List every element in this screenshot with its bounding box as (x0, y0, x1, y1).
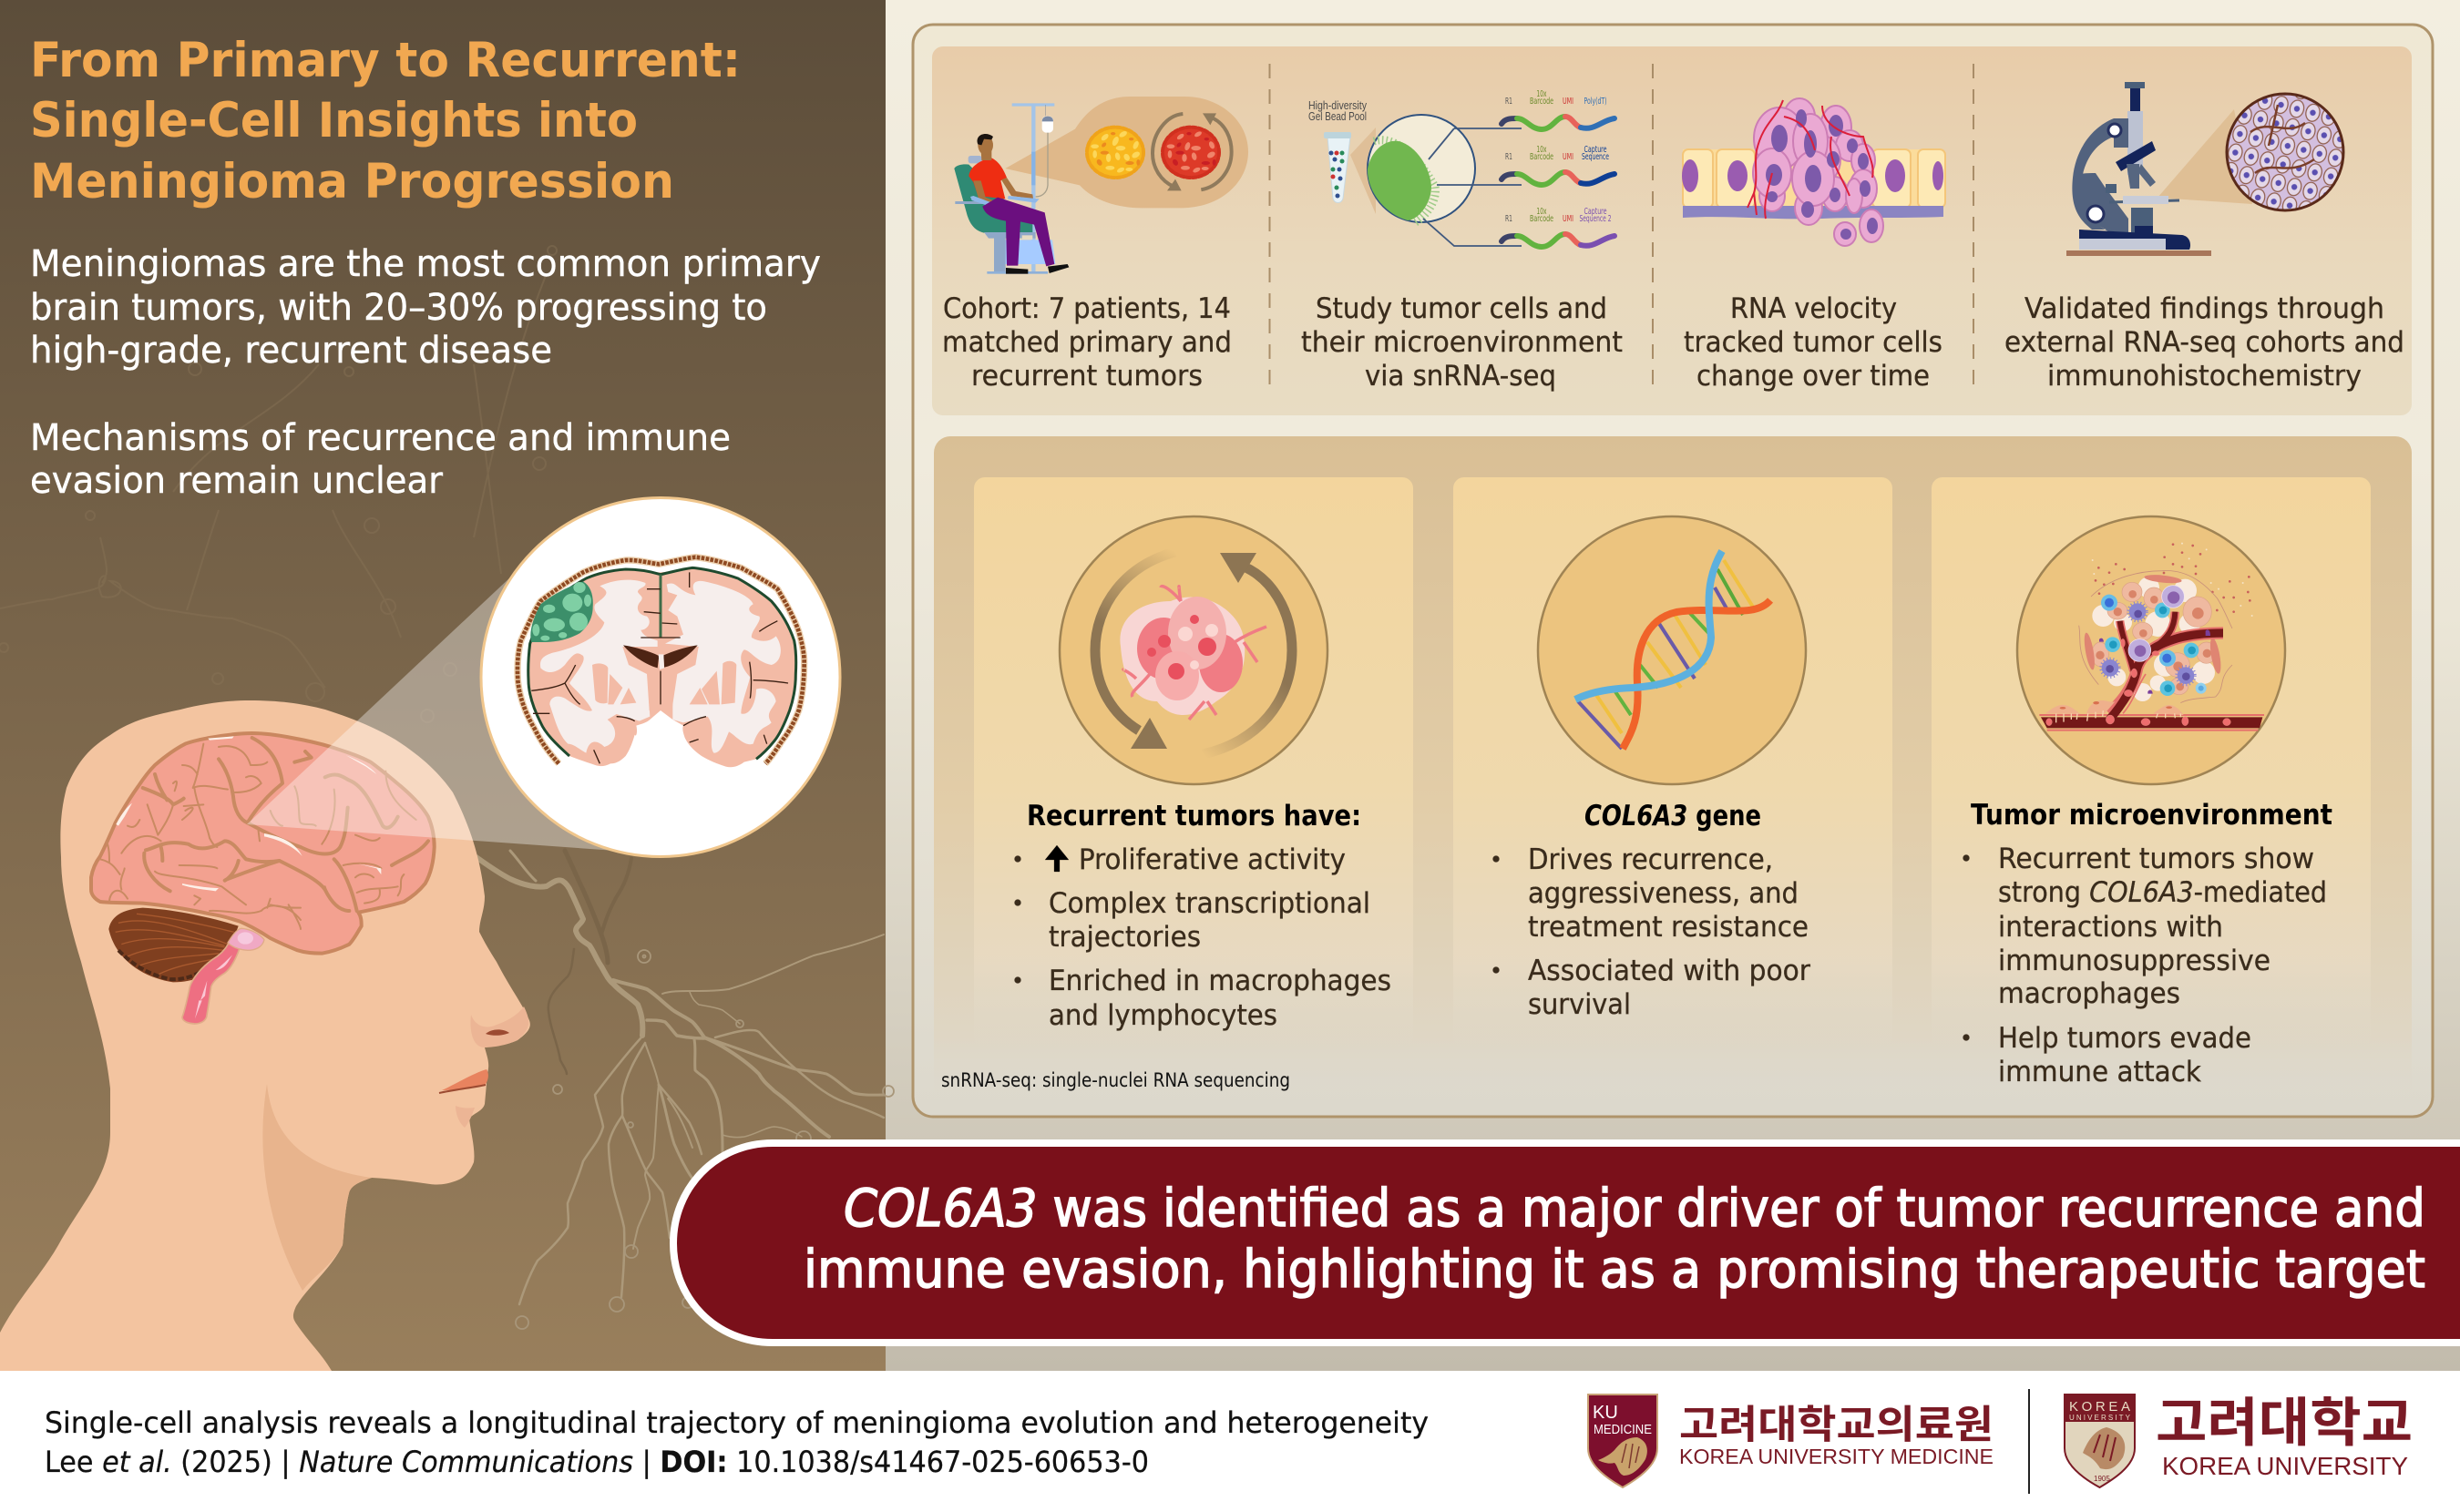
text block: cohort: recurrent tumors (971, 360, 1203, 393)
icon: gel bead and barcode sequences: Capture (1584, 207, 1607, 217)
IV pole (1012, 100, 1054, 109)
vessels (2039, 612, 2264, 730)
bullet list: aggressiveness, and (1528, 877, 1799, 910)
illustration: vein tree (471, 851, 894, 1329)
title (30, 33, 741, 209)
heading: Tumor microenvironment (1971, 799, 2332, 832)
icon: gel bead and barcode sequences: Sequence (1582, 152, 1609, 162)
panel: tumor microenvironment card (1932, 477, 2371, 1088)
text block: cohort: matched primary and (942, 326, 1232, 359)
macrophages (2102, 603, 2194, 684)
shield: UNIVERSITY (2069, 1414, 2131, 1422)
person (969, 158, 1007, 199)
red tumor (1163, 128, 1219, 178)
text block: validation: immunohistochemistry (2047, 360, 2362, 393)
bullet list: macrophages (1998, 977, 2180, 1010)
bullet list: and lymphocytes (1049, 999, 1277, 1032)
logo: Korea University Medicine: 고려대학교의료원 (1679, 1394, 1994, 1450)
text block: background statement: Meningiomas are the most common primary (30, 243, 821, 285)
text block: RNA velocity: RNA velocity (1730, 292, 1897, 325)
text block: validation: external RNA-seq cohorts and (2004, 326, 2404, 359)
pericytes (2045, 700, 2184, 722)
bullet list: Enriched in macrophages (1049, 965, 1391, 997)
panel: methods strip (932, 46, 2412, 415)
bead (1368, 115, 1475, 222)
brain slice (518, 557, 805, 767)
ventricle (623, 645, 698, 668)
divider (2028, 1389, 2030, 1494)
icon: tumor microenvironment (2039, 543, 2264, 730)
logo: Korea University (2065, 1380, 2413, 1487)
panel: COL6A3 card (1453, 477, 1892, 1047)
dura (528, 567, 796, 759)
tumor (530, 581, 593, 642)
icon: recurrence cycle with tumor (1060, 516, 1327, 784)
skull rim (518, 557, 805, 763)
cycle arrows (1153, 114, 1232, 189)
icon: tumor cells invading tissue (1682, 98, 1945, 246)
text block: background statement: brain tumors, with 20–30% progressing to (30, 287, 767, 329)
panel: findings (934, 436, 2412, 1103)
bullet list (1015, 843, 1391, 1032)
icon: DNA helix (1538, 516, 1806, 784)
icon: gel bead and barcode sequences: R1 (1505, 152, 1512, 162)
shield (2065, 1395, 2135, 1487)
icon: gel bead and barcode sequences: Sequence 2 (1580, 214, 1611, 224)
shield: KOREA (2069, 1399, 2130, 1415)
text block: background statement (30, 243, 821, 372)
decorative faint veins upper (0, 246, 557, 722)
text block: snRNA-seq: Study tumor cells and (1316, 292, 1607, 325)
text block: knowledge gap: evasion remain unclear (30, 460, 444, 502)
chair (954, 164, 1032, 233)
bullet list: Proliferative activity (1079, 843, 1346, 876)
icon: gel bead and barcode sequences: UMI (1563, 97, 1573, 107)
bullet list (1492, 843, 1810, 1021)
logo: Korea University Medicine: KOREA UNIVERSITY MEDICINE (1679, 1445, 1994, 1468)
panel: recurrent tumors card (974, 477, 1413, 1047)
panel: right background (886, 0, 2460, 1371)
shield (1588, 1395, 1657, 1487)
heading: COL6A3 gene (1584, 800, 1761, 833)
text block: validation (2004, 292, 2404, 393)
icon: gel bead and barcode sequences (1308, 89, 1614, 247)
bullet list: immune attack (1998, 1056, 2201, 1088)
callout: magnified circle with brain slice (481, 497, 840, 856)
bullet list: treatment resistance (1528, 911, 1809, 944)
plasma cells (2128, 586, 2184, 661)
panel: left background (0, 0, 886, 1371)
title: Single-Cell Insights into (30, 93, 638, 148)
bullet list: immunosuppressive (1998, 945, 2270, 977)
bullet list: survival (1528, 988, 1631, 1021)
icon: gel bead and barcode sequences: UMI (1563, 152, 1573, 162)
icon: gel bead and barcode sequences: UMI (1563, 214, 1573, 224)
icon: gel bead and barcode sequences: 10x (1536, 89, 1547, 99)
icon: gel bead and barcode sequences: 10x (1536, 145, 1547, 155)
text block: knowledge gap (30, 417, 731, 502)
illustration: brain (91, 733, 435, 1024)
bullet list: strong COL6A3-mediated (1998, 876, 2327, 909)
text block: cohort: Cohort: 7 patients, 14 (943, 292, 1231, 325)
sulci (531, 572, 788, 763)
icon: gel bead and barcode sequences: 10x (1536, 207, 1547, 217)
text block: knowledge gap: Mechanisms of recurrence and immune (30, 417, 731, 459)
highlights (116, 736, 381, 891)
bullet list: Drives recurrence, (1528, 843, 1773, 876)
text block: RNA velocity (1684, 292, 1942, 393)
panel: study design card (913, 25, 2433, 1117)
text block: validation: Validated findings through (2024, 292, 2384, 325)
text block: RNA velocity: tracked tumor cells (1684, 326, 1942, 359)
nose (470, 1006, 528, 1047)
icon: patient with IV and tumors (954, 97, 1248, 274)
brain gyri (100, 738, 428, 929)
citation: Single-cell analysis reveals a longitudinal trajectory of meningioma evolution and heterogeneity (45, 1405, 1429, 1440)
citation: Lee et al. (2025) | Nature Communications | DOI: 10.1038/s41467-025-60653-0 (45, 1445, 1149, 1479)
title: From Primary to Recurrent: (30, 33, 741, 88)
icon: gel bead and barcode sequences: R1 (1505, 214, 1512, 224)
icon: gel bead and barcode sequences: Capture (1584, 145, 1607, 155)
text block: background statement: high-grade, recurrent disease (30, 330, 552, 372)
icon: gel bead and barcode sequences: Gel Bead Pool (1308, 109, 1367, 123)
conclusion banner (673, 1143, 2460, 1343)
bullet list: trajectories (1049, 921, 1201, 954)
spindle cells (2082, 574, 2223, 675)
bullet list: interactions with (1998, 911, 2223, 944)
icon: gel bead and barcode sequences: Barcode (1530, 214, 1553, 224)
icon: gel bead and barcode sequences: Barcode (1530, 152, 1553, 162)
icon: gel bead and barcode sequences: Poly(dT) (1584, 97, 1607, 107)
central pink nuclei (622, 647, 699, 710)
white matter (540, 580, 658, 753)
illustration: head profile (0, 700, 530, 1371)
heading: Recurrent tumors have: (1027, 800, 1361, 833)
logo: Korea University: KOREA UNIVERSITY (2162, 1452, 2408, 1480)
lips (442, 1069, 488, 1090)
cerebellum (108, 908, 239, 982)
secreted particles (2095, 543, 2251, 613)
icon: gel bead and barcode sequences: Barcode (1530, 97, 1553, 107)
divider lines (1270, 64, 1973, 393)
yellow tumor (1087, 128, 1143, 178)
icon: gel bead and barcode sequences: R1 (1505, 97, 1512, 107)
tube (1327, 137, 1350, 202)
text block: snRNA-seq: via snRNA-seq (1365, 360, 1556, 393)
bullet list: Recurrent tumors show (1998, 843, 2314, 875)
pale cell mass (2092, 577, 2215, 701)
bullet list: Complex transcriptional (1049, 887, 1370, 920)
label: High-diversity (1308, 98, 1367, 112)
citation (45, 1405, 1429, 1479)
callout: magnification cone (247, 577, 616, 851)
footnote: snRNA-seq: single-nuclei RNA sequencing (941, 1069, 1290, 1091)
bullet list: Associated with poor (1528, 955, 1810, 987)
logo: Korea University Medicine (1588, 1394, 1994, 1487)
text block: snRNA-seq: their microenvironment (1301, 326, 1623, 359)
logo: Korea University: 고려대학교 (2156, 1380, 2413, 1456)
shield: MEDICINE (1594, 1422, 1652, 1437)
title: Meningioma Progression (30, 154, 674, 209)
text block: RNA velocity: change over time (1696, 360, 1930, 393)
shield: 1905 (2094, 1475, 2110, 1483)
text block: cohort (942, 292, 1232, 393)
icon: microscope with IHC view (2066, 82, 2343, 256)
shield: KU (1593, 1403, 1618, 1423)
text block: snRNA-seq (1301, 292, 1623, 393)
lymphocytes (2101, 595, 2207, 696)
barcode strands (1502, 117, 1614, 247)
cortex (528, 567, 796, 767)
bullet list (1963, 843, 2327, 1088)
panel: footer (0, 1371, 2460, 1512)
brainstem (182, 928, 264, 1024)
bullet list: Help tumors evade (1998, 1022, 2251, 1055)
